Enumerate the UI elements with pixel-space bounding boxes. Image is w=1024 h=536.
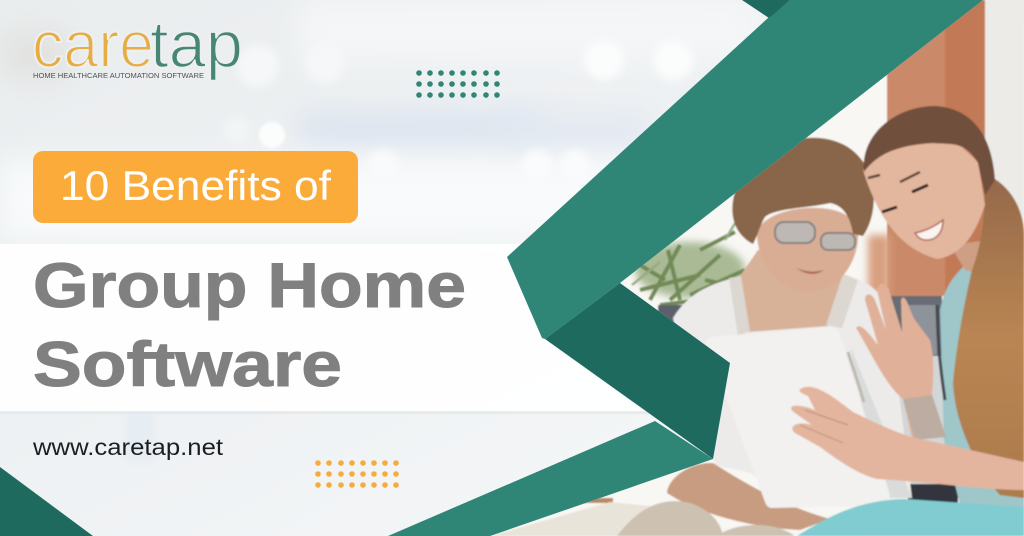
- badge: 10 Benefits of: [33, 151, 358, 223]
- scrub trousers: [797, 499, 1024, 536]
- glasses: [775, 222, 855, 250]
- plant: [632, 215, 750, 305]
- logo: caretap: tap: [150, 7, 243, 81]
- logo: caretap: [32, 7, 243, 81]
- chest and neck: [740, 250, 843, 332]
- eyes, brows and smile: [882, 185, 928, 212]
- ponytail: [953, 175, 1024, 498]
- dots: teal grid: [416, 70, 500, 98]
- white title band: [0, 244, 660, 414]
- knees: [617, 501, 795, 536]
- photo: caregiver and senior woman with tablet: [480, 0, 1024, 536]
- ribbon: dark centre: [545, 283, 730, 459]
- mouth: [796, 268, 824, 274]
- neck: [954, 240, 980, 272]
- ribbon: upper light teal: [507, 0, 983, 339]
- lace collar: [729, 274, 858, 336]
- face: [863, 143, 985, 259]
- dots: orange grid: [315, 460, 399, 488]
- heading: Group Home Software: Software: [33, 330, 342, 400]
- blouse: [673, 274, 912, 500]
- ribbon: top dark corner: [742, 0, 790, 18]
- tablet: [738, 334, 890, 509]
- waving hand and forearm: [856, 284, 934, 438]
- hair: [732, 138, 874, 244]
- younger woman: [863, 106, 1024, 510]
- face: [756, 206, 859, 276]
- sofa: [658, 296, 958, 504]
- heading: Group Home Software: [33, 251, 466, 400]
- badge: 10 Benefits of: 10 Benefits of: [60, 162, 331, 209]
- triangle: bottom-left corner: [0, 467, 93, 536]
- hair cap: [864, 106, 995, 195]
- logo: caretap: care: [32, 7, 154, 81]
- holding hand and arm: [791, 387, 1024, 490]
- tablet edge: [848, 352, 864, 402]
- older woman's arm: [667, 463, 830, 530]
- heading: Group Home Software: Group Home: [33, 251, 466, 321]
- top: [940, 260, 1024, 510]
- website: www.caretap.net: [32, 434, 224, 460]
- older woman: [673, 138, 912, 500]
- ribbon: lower light teal: [388, 421, 713, 536]
- photo backdrop: [480, 0, 1024, 536]
- logo: caretap: HOME HEALTHCARE AUTOMATION SOFTWARE: [33, 73, 204, 80]
